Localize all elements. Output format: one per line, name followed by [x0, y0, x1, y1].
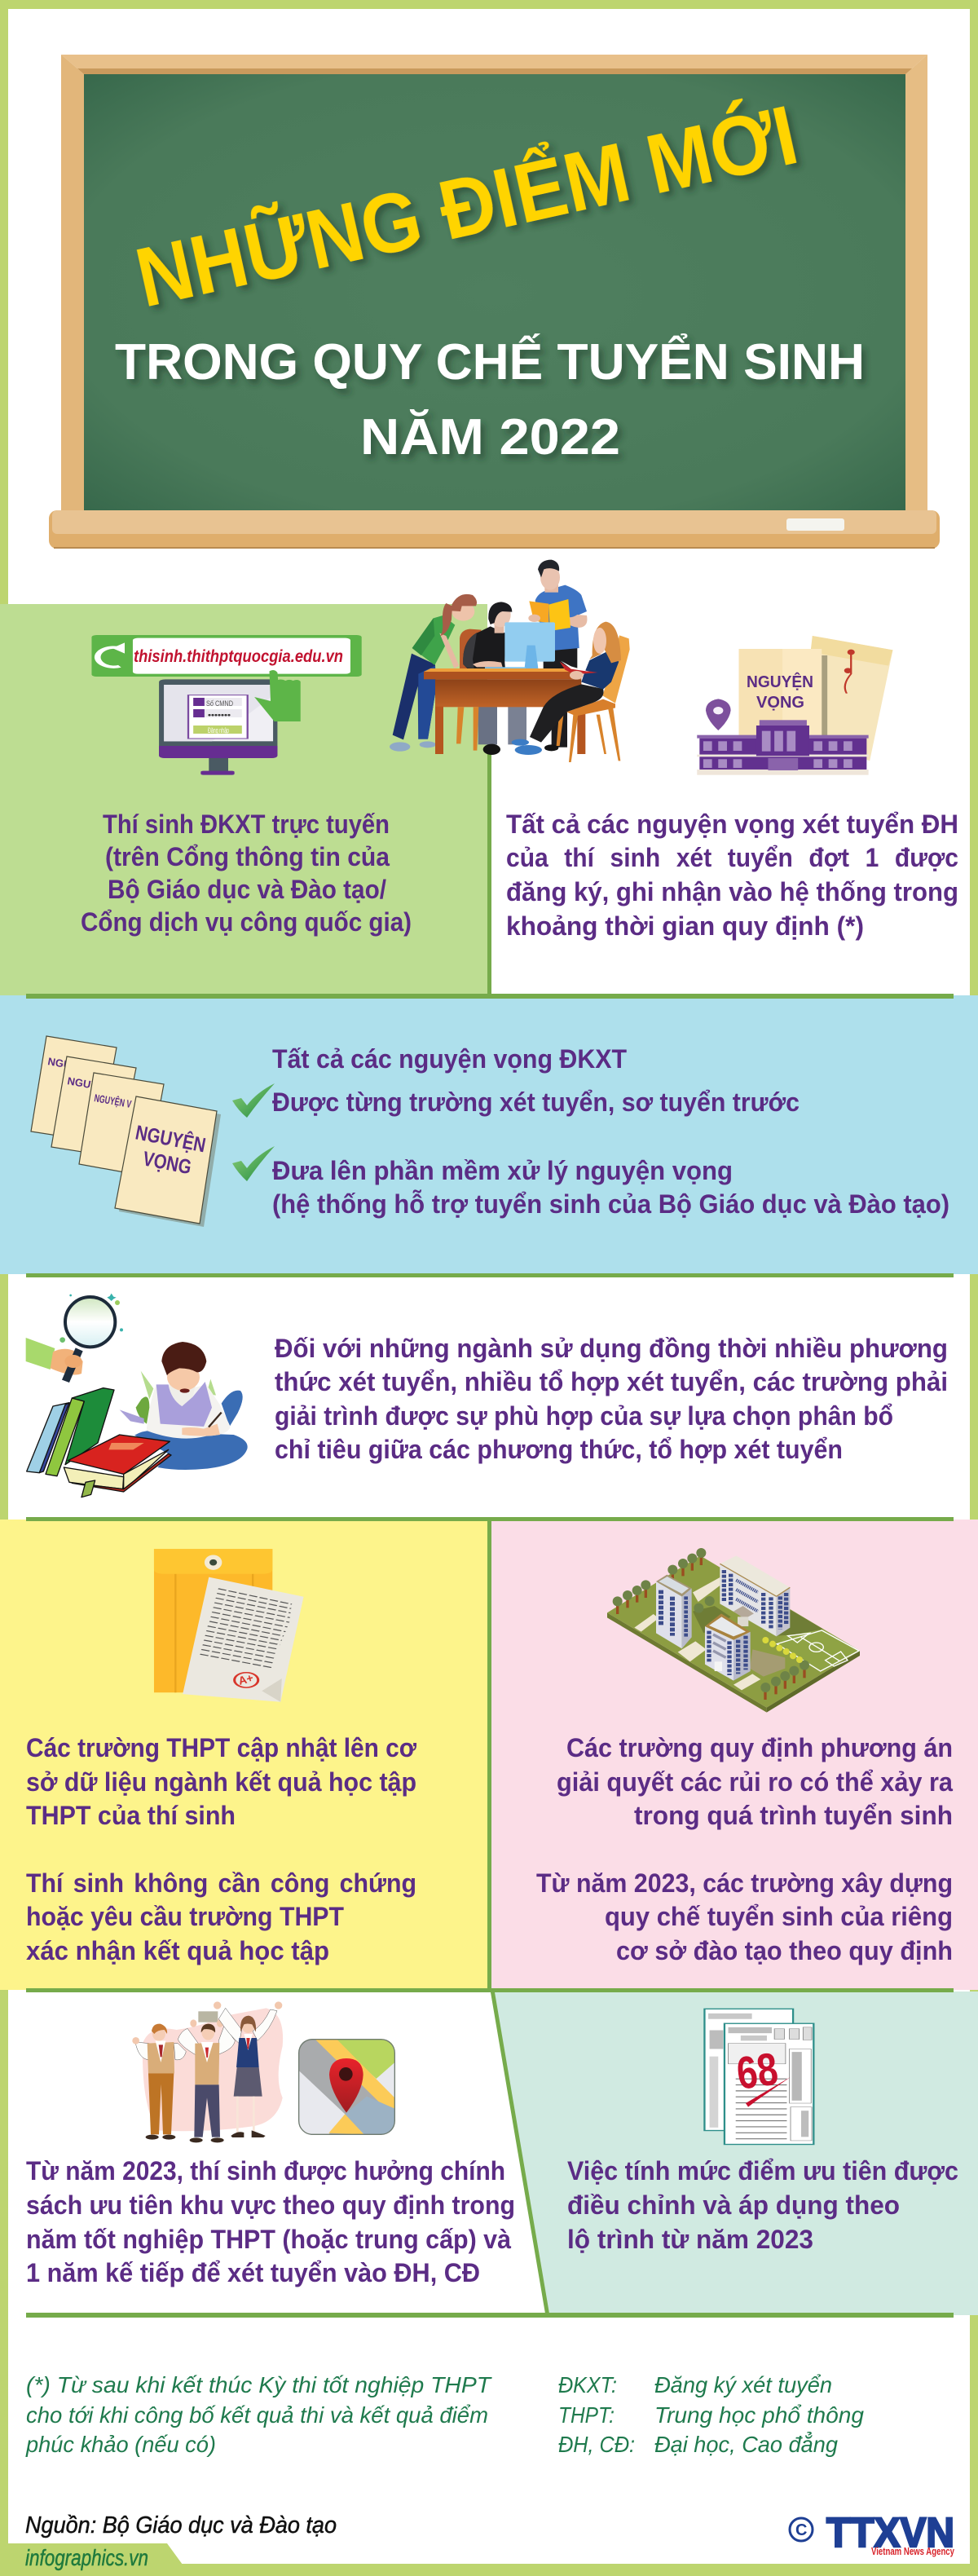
text: explanation requirement: Đối với những ngành sử dụng đồng thời nhiều phương — [275, 1334, 948, 1363]
illustration: student with magnifier and books — [26, 1294, 248, 1498]
text: school risk plans: Từ năm 2023, các trường xây dựng — [536, 1868, 953, 1898]
text: processing of wishes: (hệ thống hỗ trợ tuyển sinh của Bộ Giáo dục và Đào tạo) — [272, 1189, 949, 1219]
address text: thisinh.thithptquocgia.edu.vn — [134, 647, 343, 666]
text: all wishes registered: khoảng thời gian quy định (*) — [506, 911, 864, 941]
text: high school data: Các trường THPT cập nhật lên cơ — [26, 1733, 416, 1762]
icon: stack of wish documents: NGUYỆN — [134, 1119, 208, 1157]
text: online registration: Cổng dịch vụ công quốc gia) — [81, 907, 412, 937]
book stack — [27, 1388, 171, 1498]
text: explanation requirement — [275, 1334, 948, 1464]
glossary: THPT: — [558, 2402, 615, 2428]
text: priority score: điều chỉnh và áp dụng theo — [567, 2190, 900, 2220]
chalk shelf — [49, 510, 940, 549]
icon: login labels: Đăng nhập — [208, 726, 229, 734]
magnifier and hand — [26, 1294, 123, 1383]
logo: TTXVN: C — [795, 2521, 807, 2539]
footnote: phúc khảo (nếu có) — [25, 2432, 216, 2457]
text: processing of wishes: Được từng trường xét tuyển, sơ tuyển trước — [272, 1087, 800, 1117]
table — [424, 668, 585, 754]
text: processing of wishes: Đưa lên phần mềm xử lý nguyện vọng — [272, 1156, 733, 1185]
text: school risk plans: giải quyết các rủi ro có thể xảy ra — [557, 1767, 953, 1797]
text: regional priority — [26, 2156, 515, 2287]
icon: website address bar and login monitor — [91, 635, 362, 775]
text: school risk plans — [536, 1733, 953, 1965]
text: processing of wishes: Tất cả các nguyện vọng ĐKXT — [272, 1044, 627, 1074]
icon: stack of wish documents: VỌNG — [141, 1147, 193, 1179]
icon: exam sheets — [704, 2009, 813, 2145]
panel: online registration background — [0, 604, 487, 996]
location pin — [706, 699, 731, 730]
icon: stack of wish documents: NGUYỆN V — [93, 1092, 133, 1110]
text: high school data: Thí sinh không cần công chứng — [26, 1868, 416, 1898]
website tab: infographics.vn — [25, 2545, 148, 2570]
subtitle line 1: TRONG QUY CHẾ TUYỂN SINH — [115, 334, 865, 390]
glossary: Đại học, Cao đẳng — [654, 2431, 838, 2457]
building 2 — [720, 1555, 790, 1636]
illustration: students around a table — [390, 560, 630, 762]
text: school risk plans: quy chế tuyển sinh của riêng — [605, 1902, 953, 1931]
text: online registration: (trên Cổng thông tin của — [105, 842, 390, 871]
glossary: Trung học phổ thông — [654, 2402, 864, 2428]
monitor — [159, 679, 277, 758]
building 3 — [705, 1613, 751, 1681]
text: regional priority: năm tốt nghiệp THPT (hoặc trung cấp) và — [26, 2225, 511, 2254]
document label: VỌNG — [756, 694, 804, 712]
divider lines — [26, 734, 954, 2318]
blackboard header — [49, 55, 940, 549]
text: regional priority: 1 năm kế tiếp để xét tuyển vào ĐH, CĐ — [26, 2258, 480, 2287]
illustration: isometric campus — [607, 1548, 860, 1713]
icon: check mark 1 — [232, 1083, 275, 1118]
text: explanation requirement: giải trình được sự phù hợp của sự lựa chọn phân bổ — [275, 1401, 893, 1431]
panel: mint background — [492, 1992, 978, 2315]
text: high school data — [26, 1733, 416, 1965]
icon: map pin app — [299, 2040, 394, 2134]
text: explanation requirement: chỉ tiêu giữa các phương thức, tổ hợp xét tuyển — [275, 1435, 843, 1464]
reading woman on chair — [512, 622, 630, 762]
glossary: Đăng ký xét tuyển — [654, 2372, 832, 2397]
score 68: 68 — [734, 2043, 781, 2099]
text: regional priority: Từ năm 2023, thí sinh được hưởng chính — [26, 2156, 505, 2186]
text: all wishes registered: đăng ký, ghi nhận vào hệ thống trong — [506, 877, 958, 906]
university building — [697, 720, 869, 775]
website tab — [0, 2543, 183, 2576]
boy on cushion — [120, 1342, 248, 1470]
text: all wishes registered: của thí sinh xét tuyển đợt 1 được — [506, 843, 958, 872]
glossary — [558, 2372, 864, 2457]
logo: TTXVN: TTXVN — [826, 2509, 954, 2556]
icon: stack of wish documents: NGU — [46, 1055, 73, 1071]
panel: pink background — [491, 1520, 978, 1990]
icon: stack of wish documents: NGUY — [66, 1074, 99, 1092]
footnote: (*) Từ sau khi kết thúc Kỳ thi tốt nghiệp THPT — [26, 2372, 492, 2397]
pointing hand — [254, 670, 301, 721]
text: high school data: hoặc yêu cầu trường THPT — [26, 1902, 344, 1931]
text: priority score: Việc tính mức điểm ưu tiên được — [567, 2156, 958, 2186]
address bar — [91, 635, 362, 677]
text: explanation requirement: thức xét tuyển, nhiều tổ hợp xét tuyển, các trường phải — [275, 1367, 948, 1396]
trees — [613, 1548, 809, 1700]
footnote — [25, 2372, 492, 2457]
title: NHỮNG ĐIỂM MỚI: NHỮNG ĐIỂM MỚI — [128, 86, 805, 324]
icon: login labels: ••••••• — [208, 711, 231, 719]
illustration: envelope with transcript — [154, 1549, 304, 1702]
text: high school data: sở dữ liệu ngành kết quả học tập — [26, 1767, 416, 1797]
text: high school data: xác nhận kết quả học tập — [26, 1936, 329, 1965]
document label — [747, 672, 813, 712]
wooden frame — [61, 55, 927, 511]
text: regional priority: sách ưu tiên khu vực theo quy định trong — [26, 2190, 515, 2220]
student right — [214, 2001, 282, 2137]
text: priority score — [567, 2156, 958, 2254]
glossary: ĐH, CĐ: — [558, 2432, 635, 2457]
text: all wishes registered: Tất cả các nguyện vọng xét tuyển ĐH — [506, 809, 958, 839]
text: processing of wishes — [272, 1044, 949, 1219]
source: Nguồn: Bộ Giáo dục và Đào tạo — [25, 2512, 337, 2539]
seated man — [463, 602, 526, 755]
text: school risk plans: trong quá trình tuyển sinh — [634, 1801, 953, 1830]
grade mark: A+ — [237, 1671, 254, 1687]
text: school risk plans: Các trường quy định phương án — [566, 1733, 953, 1762]
illustration: wish document and university — [697, 636, 892, 775]
computer — [485, 622, 555, 670]
text: school risk plans: cơ sở đào tạo theo quy định — [616, 1936, 953, 1965]
illustration: celebrating students — [132, 2001, 283, 2142]
text: online registration: Thí sinh ĐKXT trực tuyến — [103, 809, 390, 839]
icon: check mark 2 — [232, 1146, 275, 1181]
text: high school data: THPT của thí sinh — [26, 1801, 236, 1830]
glossary: ĐKXT: — [558, 2372, 617, 2397]
football field — [777, 1630, 859, 1671]
text: online registration: Bộ Giáo dục và Đào tạo/ — [108, 875, 386, 904]
icon: login labels: Số CMND — [206, 699, 233, 708]
panel: yellow background — [0, 1520, 487, 1990]
icon: login labels — [206, 699, 233, 734]
standing woman — [390, 594, 477, 752]
subtitle line 2: NĂM 2022 — [360, 409, 620, 465]
student left — [132, 2024, 186, 2140]
seated man chair — [460, 629, 482, 670]
icon: stack of wish documents — [31, 1036, 221, 1227]
student middle — [178, 2011, 235, 2142]
building 1 — [656, 1575, 692, 1648]
board surface — [84, 74, 905, 511]
document label: NGUYỆN — [747, 672, 813, 691]
text: priority score: lộ trình từ năm 2023 — [567, 2225, 813, 2254]
ground — [607, 1555, 860, 1713]
text: all wishes registered — [506, 809, 958, 941]
chalk — [786, 518, 844, 531]
panel: blue background — [0, 995, 978, 1274]
standing man — [528, 560, 587, 751]
footnote: cho tới khi công bố kết quả thi và kết quả điểm — [26, 2402, 488, 2428]
text: online registration — [81, 809, 412, 937]
